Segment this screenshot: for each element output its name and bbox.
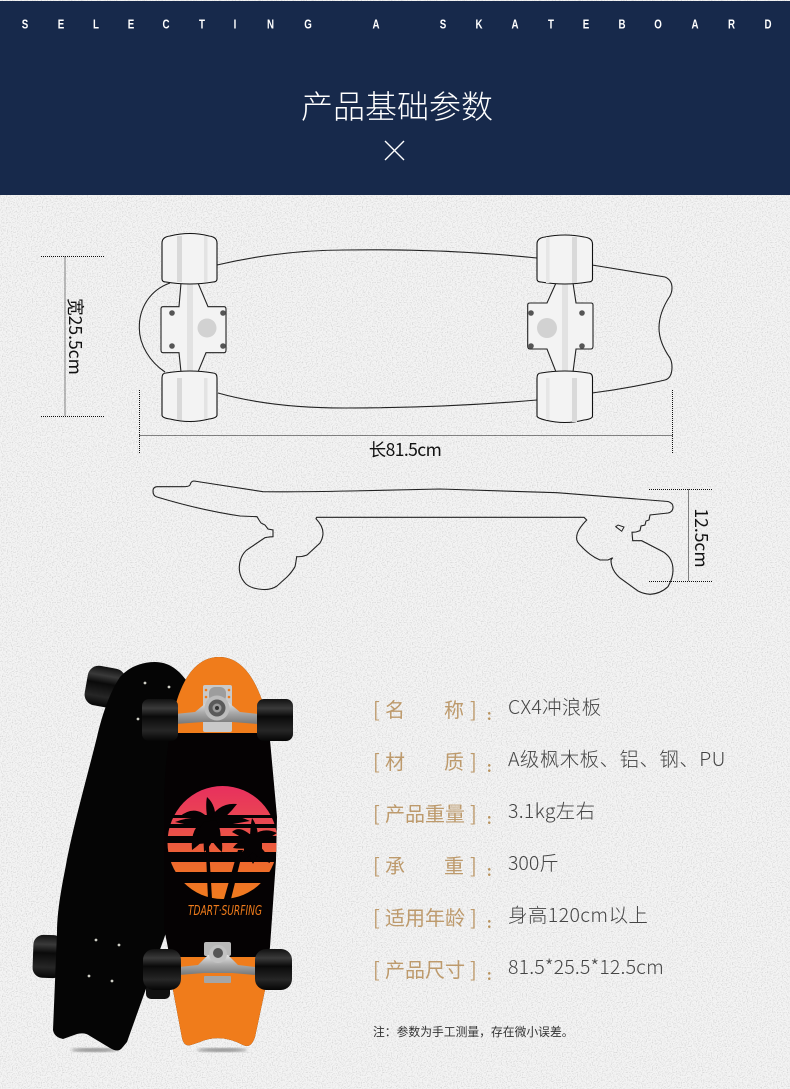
spec row: size: ]: [470, 954, 477, 983]
spec row: weight: :: [487, 809, 492, 829]
front board deck: [165, 657, 277, 1046]
top-view board diagram: [41, 234, 672, 462]
spec row: name: :: [487, 705, 492, 725]
spec row: load: 承: [385, 850, 405, 879]
right truck: [528, 235, 593, 422]
height dimension lines: [649, 490, 712, 582]
spec row: load: ]: [470, 850, 477, 879]
spec row: name: 名: [385, 694, 405, 723]
spec row: material: 质: [444, 746, 464, 775]
small triangle hole: [616, 525, 624, 531]
top front truck: [142, 685, 293, 741]
spec row: weight: [373, 795, 595, 829]
spec row: load: 重: [444, 850, 464, 879]
spec row: suitable age: 适用年龄: [385, 902, 465, 931]
spec row: material: A级枫木板、铝、钢、PU: [508, 743, 726, 772]
spec row: name: [: [373, 694, 380, 723]
spec row: name: 称: [444, 694, 464, 723]
length dimension label: 长81.5cm: [369, 437, 441, 462]
length dimension lines: [140, 390, 672, 453]
spec row: suitable age: 身高120cm以上: [508, 899, 648, 928]
back board deck: [53, 662, 186, 1050]
palm trees: [175, 797, 277, 899]
header banner: [0, 1, 790, 195]
spec row: material: [: [373, 746, 380, 775]
spec row: weight: 产品重量: [385, 798, 465, 827]
spec row: load: 300斤: [508, 847, 559, 876]
spec row: size: 81.5*25.5*12.5cm: [508, 951, 664, 980]
spec row: size: [: [373, 954, 380, 983]
spec row: suitable age: [: [373, 902, 380, 931]
floor shadows: [71, 1048, 247, 1052]
back board wheels: [32, 664, 170, 999]
sunset graphic with stripes: [168, 786, 278, 899]
spec row: size: :: [487, 965, 492, 985]
bottom front truck: [143, 942, 292, 990]
spec row: weight: 3.1kg左右: [508, 795, 595, 824]
spec row: material: [373, 743, 726, 777]
spec row: suitable age: :: [487, 913, 492, 933]
spec row: name: CX4冲浪板: [508, 691, 602, 720]
spec row: size: 产品尺寸: [385, 954, 465, 983]
board outline top view: [139, 250, 672, 408]
side-view board diagram: [153, 481, 714, 594]
spec row: load: [373, 847, 559, 881]
spec row: material: ]: [470, 746, 477, 775]
spec row: suitable age: ]: [470, 902, 477, 931]
spec row: name: ]: [470, 694, 477, 723]
spec row: load: :: [487, 861, 492, 881]
spec row: material: :: [487, 757, 492, 777]
spec row: size: [373, 951, 664, 985]
spec row: material: 材: [385, 746, 405, 775]
icon: cross mark: [385, 141, 404, 160]
title: 产品基础参数: [301, 82, 493, 128]
width dimension label: 宽25.5cm: [63, 298, 88, 375]
header tagline: SELECTINGASKATEBOARD: [22, 18, 772, 32]
left truck: [161, 234, 226, 422]
spec row: weight: [: [373, 798, 380, 827]
board brand text: TDART·SURFING: [188, 904, 262, 919]
height dimension label: 12.5cm: [689, 508, 714, 568]
width dimension lines: [41, 256, 104, 416]
spec row: load: [: [373, 850, 380, 879]
footnote: 注：参数为手工测量，存在微小误差。: [373, 1023, 574, 1040]
side profile outline: [153, 481, 673, 594]
product photo: two skateboards: [32, 650, 293, 1060]
back board bolts: [88, 682, 170, 982]
spec row: name: [373, 691, 602, 725]
spec row: weight: ]: [470, 798, 477, 827]
specification list: [373, 691, 726, 1040]
spec row: suitable age: [373, 899, 648, 933]
